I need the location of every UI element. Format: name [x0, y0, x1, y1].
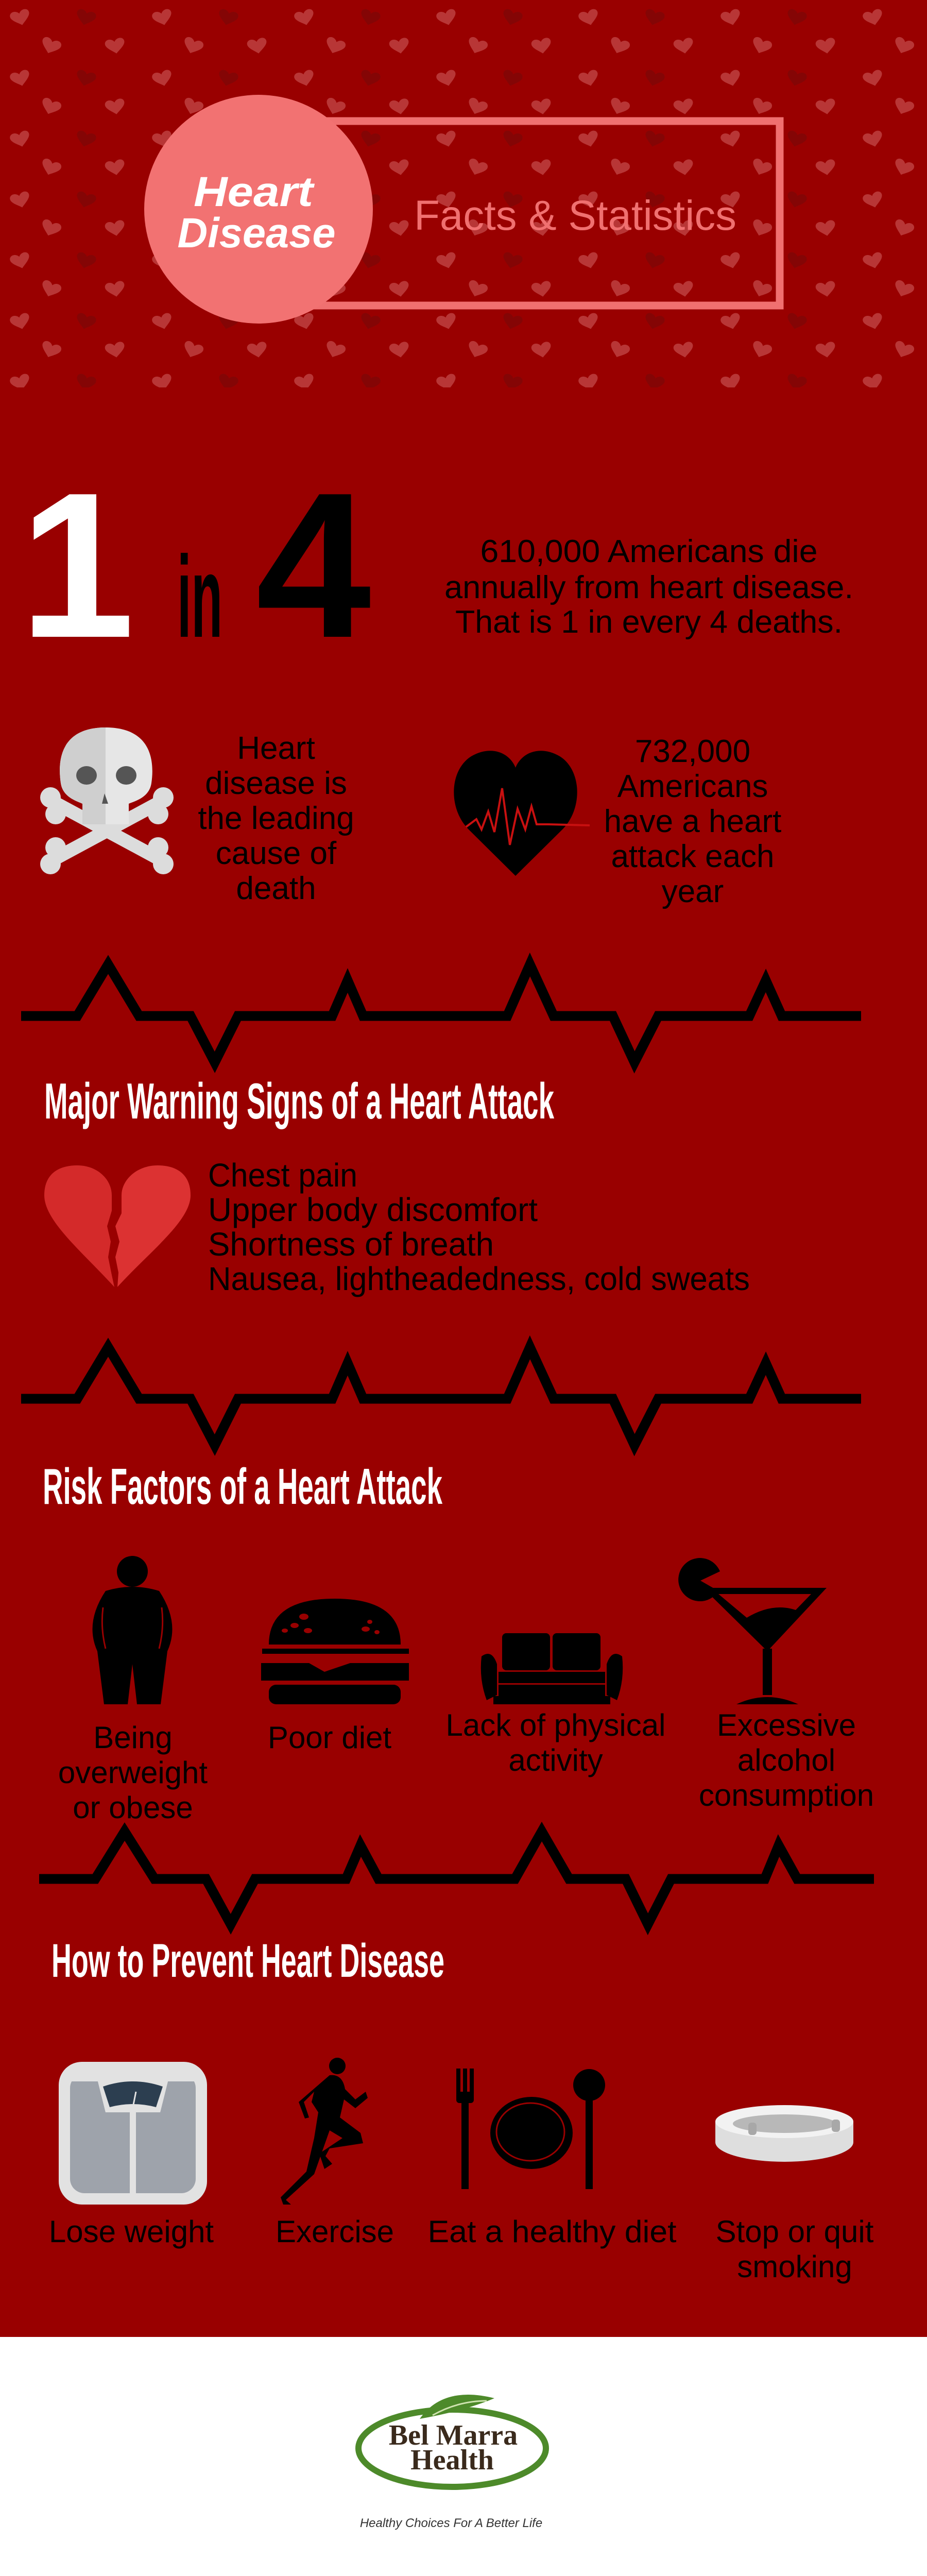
icon: broken heart: [44, 1165, 191, 1287]
stat: 1 in 4: in: [177, 532, 222, 662]
title: header: [144, 95, 780, 324]
labels: risk factors: overweight: [58, 1755, 208, 1790]
logo: Bel Marra Health: [358, 2395, 546, 2530]
labels: prevention: smoking: [737, 2249, 852, 2284]
icon: heart with ecg: [454, 751, 590, 876]
text: 732,000 heart attacks: 732,000: [635, 734, 750, 769]
labels: risk factors: alcohol: [737, 1743, 835, 1777]
text: leading cause of death: [198, 731, 354, 906]
text: leading cause of death: disease is: [205, 766, 347, 801]
labels: risk factors: [58, 1708, 874, 1825]
labels: risk factors: or obese: [73, 1790, 193, 1825]
labels: risk factors: consumption: [699, 1778, 874, 1812]
title text: [177, 168, 336, 257]
list: warning signs: Upper body discomfort: [208, 1191, 538, 1228]
labels: risk factors: activity: [508, 1743, 603, 1777]
title text: Heart: [194, 168, 315, 215]
text: 732,000 heart attacks: [604, 734, 781, 909]
text: leading cause of death: death: [236, 871, 316, 906]
labels: risk factors: Lack of physical: [446, 1708, 665, 1742]
stat: 1 in 4: 1: [20, 450, 135, 681]
icon: burger: [261, 1599, 409, 1704]
stat: 1 in 4: [20, 450, 372, 681]
text: 732,000 heart attacks: Americans: [617, 769, 768, 804]
divider: heartbeat line 2: [21, 1347, 861, 1445]
subtitle: Facts & Statistics: [414, 192, 736, 239]
title circle: [144, 95, 373, 324]
icon: cocktail: [678, 1558, 827, 1704]
list: warning signs: [208, 1157, 750, 1297]
icon: skull and crossbones: [40, 727, 174, 874]
text: 732,000 heart attacks: have a heart: [604, 804, 781, 839]
logo: Bel Marra Health: Bel Marra: [389, 2419, 518, 2451]
labels: prevention: Exercise: [276, 2214, 394, 2249]
logo: Bel Marra Health: Health: [410, 2444, 494, 2476]
title frame: [313, 121, 780, 306]
text: leading cause of death: Heart: [237, 731, 315, 766]
text: 610,000 deaths: annually from heart disease.: [444, 570, 853, 605]
icon: ashtray: [715, 2105, 853, 2162]
list: warning signs: Chest pain: [208, 1157, 357, 1194]
icon: overweight person: [93, 1556, 172, 1704]
list: warning signs: Nausea, lightheadedness, cold sweats: [208, 1260, 750, 1297]
text: 610,000 deaths: 610,000 Americans die: [480, 534, 818, 569]
labels: prevention: [49, 2214, 874, 2284]
text: 610,000 deaths: That is 1 in every 4 deaths.: [455, 604, 843, 640]
list: warning signs: Shortness of breath: [208, 1226, 494, 1263]
icon: runner: [281, 2058, 368, 2205]
icon: sofa: [481, 1633, 623, 1704]
logo: Bel Marra Health: Healthy Choices For A Better Life: [360, 2516, 542, 2530]
labels: risk factors: Poor diet: [268, 1720, 391, 1755]
stat: 1 in 4: 4: [256, 450, 372, 681]
divider: heartbeat line 3: [39, 1832, 874, 1924]
text: 732,000 heart attacks: attack each: [611, 839, 775, 874]
icon: bathroom scale: [59, 2062, 207, 2205]
text: leading cause of death: cause of: [216, 836, 337, 871]
labels: risk factors: Excessive: [717, 1708, 856, 1742]
labels: risk factors: Being: [93, 1720, 173, 1755]
labels: prevention: Stop or quit: [716, 2214, 874, 2249]
title text: Disease: [177, 210, 336, 257]
divider: heartbeat line 1: [21, 964, 861, 1062]
text: leading cause of death: the leading: [198, 801, 354, 836]
heading: prevention: How to Prevent Heart Disease: [52, 1935, 444, 1987]
icon: fork plate spoon: [456, 2069, 605, 2189]
heading: risk factors: Risk Factors of a Heart Attack: [43, 1458, 442, 1515]
labels: prevention: Lose weight: [49, 2214, 214, 2249]
text: 610,000 deaths: [444, 534, 853, 640]
text: 732,000 heart attacks: year: [662, 874, 724, 909]
labels: prevention: Eat a healthy diet: [427, 2214, 677, 2249]
